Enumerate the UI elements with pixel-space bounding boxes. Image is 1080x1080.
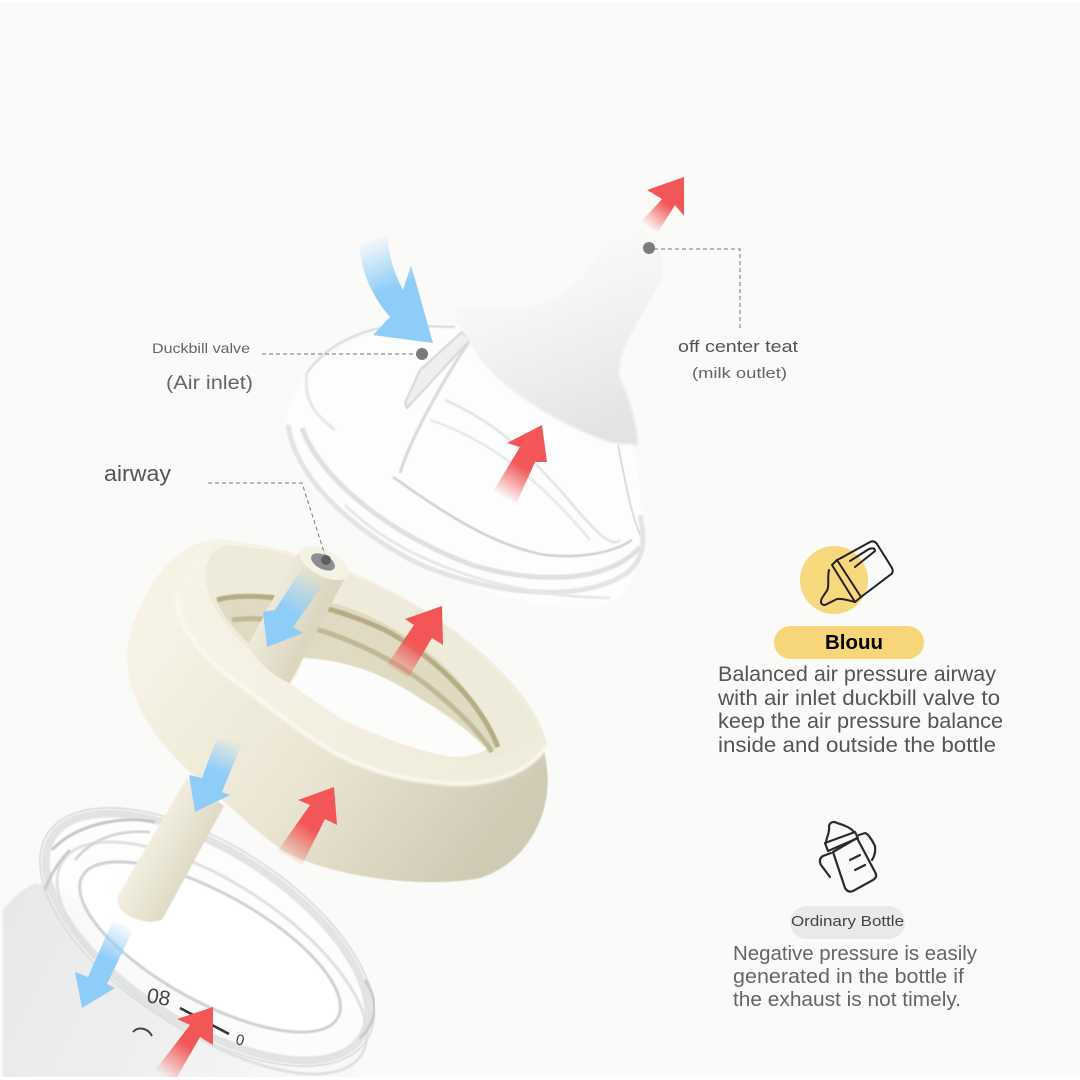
red arrow: inside teat [492,425,547,502]
text: Blouu description: Balanced air pressure airway [718,663,997,686]
pill: Blouu [774,626,924,659]
airway labels and leader lines [104,242,798,565]
panel: Blouu [717,541,1003,757]
bottle scale markings [132,988,244,1046]
text: Blouu description: inside and outside the bottle [718,734,996,757]
label: milk outlet: (milk outlet) [692,365,787,382]
icon: tilted bottle on yellow circle [800,541,893,614]
tube lower section [117,778,224,922]
text: ordinary bottle description: the exhaust is not timely. [733,989,961,1011]
off center teat [453,225,663,445]
label: airway: airway [104,461,171,486]
pill: Ordinary Bottle: Ordinary Bottle [791,913,904,930]
panel: ordinary bottle [733,822,977,1011]
nipple base, transparent collar [287,323,644,607]
blue arrow: duckbill inlet [360,237,433,343]
label: off center teat: off center teat [678,337,798,356]
text: ordinary bottle description: Negative pressure is easily [733,943,977,965]
label: air inlet: (Air inlet) [166,373,253,394]
red arrow: teat outlet [640,177,684,232]
red arrow: collar lower [277,787,337,865]
red arrow: bottle [150,1007,213,1077]
leader: off center teat [643,242,740,331]
text: Blouu description: keep the air pressure balance [718,710,1003,733]
pill: Ordinary Bottle [790,906,905,939]
tube upper section with airway opening [248,539,354,683]
icon: bottle with handles [820,822,876,892]
baby bottle neck illustration [3,806,376,1077]
bottle scale markings: 0 [234,1031,246,1050]
text: ordinary bottle description [733,943,977,1011]
text: Blouu description: with air inlet duckbill valve to [717,687,1000,710]
label: duckbill valve: Duckbill valve [152,340,250,356]
text: ordinary bottle description: generated in the bottle if [733,966,964,988]
red arrow: collar upper [387,606,443,678]
blue arrow: into bottle [75,920,133,1008]
text: Blouu description [717,663,1003,757]
blue arrow: inside airway [263,567,323,647]
leader: duckbill valve [262,348,428,360]
pill: Blouu: Blouu [825,632,883,654]
bottle scale markings: 08 [145,984,172,1011]
infographic canvas [2,177,1002,1077]
leader: airway [208,483,331,565]
threaded collar ring [127,539,548,882]
blue arrow: below collar [189,738,242,812]
